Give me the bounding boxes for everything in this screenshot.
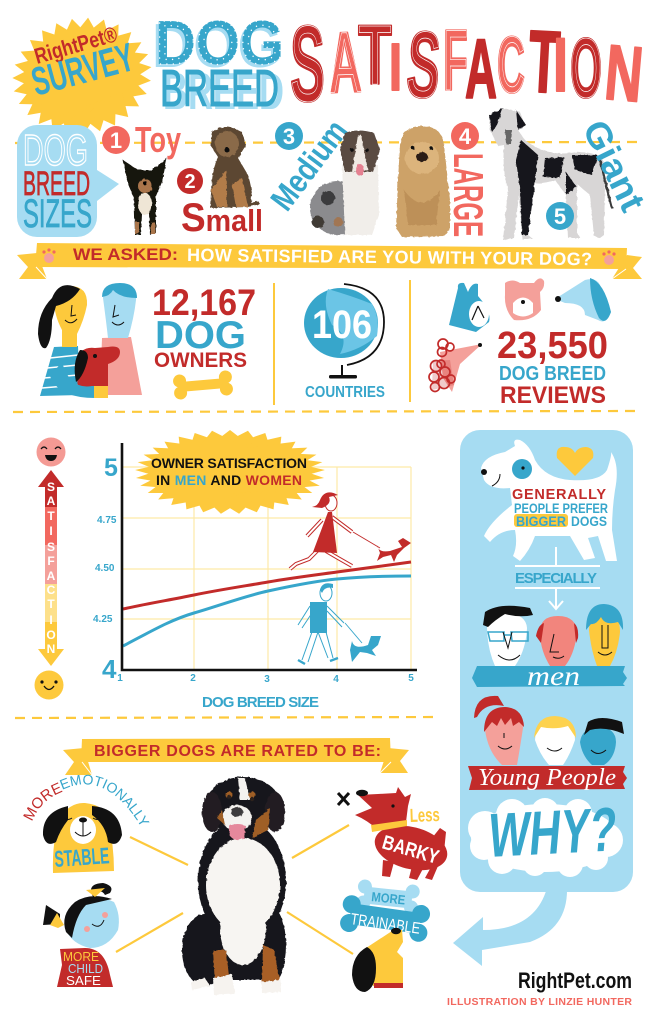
label: satisfaction vertical letters: I bbox=[49, 613, 53, 627]
trait: more trainable bones: TRAINABLE bbox=[349, 911, 421, 938]
callout: owner satisfaction starburst: OWNER SATISFACTION bbox=[151, 455, 307, 471]
stat: 12,167 dog owners: DOG bbox=[155, 314, 246, 357]
trait: more trainable bones: MORE bbox=[371, 889, 406, 908]
photo: border terrier bbox=[210, 127, 260, 208]
ribbon: men bbox=[472, 661, 627, 691]
label: satisfaction vertical letters: A bbox=[47, 569, 56, 583]
trait: less barky: Less bbox=[409, 805, 440, 827]
y axis labels: 5 bbox=[104, 454, 118, 482]
white dog with heart bbox=[481, 440, 617, 561]
trait: more child safe: SAFE bbox=[66, 974, 101, 988]
title: Satisfaction: O bbox=[570, 21, 602, 115]
ribbon: young people: Young People bbox=[478, 765, 616, 791]
title: Dog Breed: DOG bbox=[155, 9, 284, 78]
text: generally people prefer bigger dogs: GENERALLY bbox=[512, 487, 606, 503]
label: countries: COUNTRIES bbox=[305, 384, 385, 401]
callout: owner satisfaction starburst bbox=[135, 417, 355, 520]
size 4 label: Large: LARGE bbox=[445, 153, 492, 237]
title: Dog Breed: DOG bbox=[155, 9, 284, 78]
panel: dog breed sizes bubble: DOG bbox=[23, 126, 88, 175]
label: satisfaction vertical letters: O bbox=[46, 628, 56, 642]
trait: more child safe: CHILD bbox=[68, 962, 103, 976]
badge: RightPet Survey starburst bbox=[0, 0, 184, 152]
icon: globe with 106 bbox=[304, 284, 384, 378]
title: Satisfaction: I bbox=[553, 23, 568, 108]
satisfaction scale arrow bbox=[34, 438, 66, 700]
size 2 label: Small: 2 bbox=[184, 171, 196, 193]
size 5 label: Giant: Giant bbox=[575, 114, 650, 218]
illustration: woman walking dog bbox=[290, 492, 411, 569]
illustration: yellow dog looking up bbox=[352, 928, 403, 992]
title: Satisfaction: S bbox=[290, 3, 325, 124]
trait: more emotionally stable: EMOTIONALLY bbox=[60, 774, 150, 824]
size 4 label: Large bbox=[445, 122, 492, 237]
title: Satisfaction: A bbox=[327, 14, 363, 112]
title: Satisfaction: F bbox=[443, 13, 468, 109]
callout: owner satisfaction starburst: IN MEN AND WOMEN bbox=[156, 472, 302, 488]
title: Satisfaction: S bbox=[290, 3, 325, 124]
icon: globe with 106: 106 bbox=[312, 303, 372, 347]
title: Satisfaction: S bbox=[404, 11, 444, 118]
x axis labels: 4 bbox=[333, 674, 339, 685]
trait: more child safe: MORE bbox=[63, 949, 99, 964]
title: Satisfaction: I bbox=[389, 30, 402, 105]
stat: 23,550 dog breed reviews: REVIEWS bbox=[500, 382, 606, 409]
x axis labels: 5 bbox=[408, 673, 414, 684]
banner: we asked bbox=[17, 243, 642, 279]
group: men faces bbox=[483, 604, 623, 666]
x axis labels: 1 bbox=[117, 673, 123, 684]
cloud: why bbox=[468, 795, 623, 877]
panel: preference bubble with tail arrow bbox=[453, 430, 633, 966]
banner: we asked: HOW SATISFIED ARE YOU WITH YOUR DOG? bbox=[187, 245, 592, 269]
stat: 23,550 dog breed reviews: DOG BREED bbox=[499, 363, 606, 385]
trait: more child safe bbox=[43, 883, 119, 988]
icons: dog breed heads bbox=[429, 278, 611, 392]
title: Satisfaction: C bbox=[497, 20, 525, 109]
label: satisfaction vertical letters: I bbox=[49, 524, 53, 538]
illustration: man walking dog bbox=[298, 583, 381, 664]
panel: dog breed sizes bubble bbox=[17, 125, 119, 237]
title: Satisfaction: A bbox=[327, 14, 363, 112]
title: Satisfaction: F bbox=[443, 13, 468, 109]
title: Dog Breed: DOG bbox=[152, 12, 282, 81]
banner: bigger dogs are rated to be bbox=[63, 738, 409, 775]
series: men bbox=[123, 576, 411, 646]
size 2 label: Small: Small bbox=[181, 196, 263, 240]
title: Dog Breed bbox=[152, 9, 284, 121]
size 3 label: Medium: Medium bbox=[263, 113, 355, 217]
title: Satisfaction: T bbox=[358, 8, 392, 102]
label: satisfaction vertical letters: C bbox=[47, 583, 56, 597]
badge: RightPet Survey starburst: RightPet® bbox=[31, 21, 120, 69]
stat: 12,167 dog owners bbox=[152, 282, 256, 372]
group: young people faces bbox=[474, 696, 624, 765]
trait: less barky: BARKY bbox=[380, 832, 442, 869]
stat: 23,550 dog breed reviews: 23,550 bbox=[497, 325, 608, 367]
icon: content yellow face bbox=[34, 670, 64, 700]
credit: rightpet.com bbox=[447, 968, 632, 1008]
panel: dog breed sizes bubble: BREED bbox=[23, 165, 90, 203]
y axis labels bbox=[93, 454, 118, 684]
trait: more emotionally stable: MORE bbox=[23, 782, 62, 821]
y axis labels: 4 bbox=[102, 654, 117, 684]
title: Satisfaction: C bbox=[497, 20, 525, 109]
trait: more trainable bones bbox=[339, 879, 431, 943]
size 4 label: Large: 4 bbox=[459, 124, 472, 149]
text: generally people prefer bigger dogs: BIGGER bbox=[516, 514, 566, 529]
label: satisfaction vertical letters: A bbox=[47, 494, 56, 508]
size 1 label: Toy: 1 bbox=[110, 128, 122, 153]
stat: 12,167 dog owners: OWNERS bbox=[154, 349, 247, 372]
label: satisfaction vertical letters: F bbox=[47, 554, 55, 568]
title: Satisfaction: S bbox=[404, 11, 444, 118]
label: satisfaction vertical letters: S bbox=[47, 480, 55, 494]
title: Dog Breed: BREED bbox=[163, 63, 284, 121]
stat: 23,550 dog breed reviews bbox=[497, 325, 608, 409]
photo: chow chow bbox=[396, 126, 450, 237]
label: satisfaction vertical letters: T bbox=[47, 597, 55, 611]
size 5 label: Giant: 5 bbox=[554, 204, 566, 229]
trait: less barky bbox=[338, 787, 452, 880]
size 1 label: Toy bbox=[102, 119, 181, 160]
label: satisfaction vertical letters: T bbox=[47, 509, 55, 523]
illustration: couple hugging dog bbox=[38, 283, 142, 398]
title: Satisfaction: T bbox=[358, 8, 392, 102]
series: women bbox=[123, 562, 411, 609]
stat: 12,167 dog owners: 12,167 bbox=[152, 282, 256, 323]
x axis labels bbox=[117, 673, 414, 685]
icon: happy pink face bbox=[36, 438, 66, 466]
photo: great dane bbox=[489, 108, 612, 240]
trait: more emotionally stable bbox=[23, 774, 150, 873]
especially with arrow: ESPECIALLY bbox=[515, 570, 597, 587]
axis title: DOG BREED SIZE bbox=[202, 694, 319, 711]
y axis labels: 4.50 bbox=[95, 563, 115, 574]
size 1 label: Toy: Toy bbox=[135, 119, 181, 160]
title: Satisfaction bbox=[290, 3, 646, 124]
panel: dog breed sizes bubble: SIZES bbox=[23, 192, 92, 236]
title: Satisfaction: A bbox=[465, 22, 497, 116]
title: Satisfaction: O bbox=[570, 21, 602, 115]
size 3 label: Medium: 3 bbox=[283, 124, 295, 149]
badge: RightPet Survey starburst: SURVEY bbox=[27, 35, 139, 105]
banner: we asked: WE ASKED: bbox=[73, 245, 178, 264]
photo: australian shepherd bbox=[310, 130, 380, 235]
photo: chihuahua bbox=[123, 158, 167, 235]
title: Dog Breed: BREED bbox=[160, 60, 279, 118]
ribbon: men: men bbox=[527, 661, 580, 691]
title: Satisfaction: T bbox=[526, 11, 562, 112]
label: satisfaction vertical letters: S bbox=[47, 540, 55, 554]
text: generally people prefer bigger dogs bbox=[512, 487, 608, 529]
x axis labels: 3 bbox=[264, 674, 270, 685]
size 2 label: Small bbox=[177, 168, 263, 240]
photo: bernese mountain dog bbox=[182, 777, 286, 995]
banner: bigger dogs are rated to be: BIGGER DOGS ARE RATED TO BE: bbox=[94, 743, 381, 760]
y axis labels: 4.75 bbox=[97, 515, 117, 526]
label: satisfaction vertical letters bbox=[46, 480, 56, 656]
label: satisfaction vertical letters: N bbox=[47, 642, 55, 656]
y axis labels: 4.25 bbox=[93, 614, 113, 625]
text: generally people prefer bigger dogs: PEOPLE PREFER bbox=[514, 501, 608, 516]
line chart: owner satisfaction bbox=[93, 443, 417, 711]
x axis labels: 2 bbox=[190, 673, 196, 684]
size 5 label: Giant bbox=[546, 114, 650, 230]
text: generally people prefer bigger dogs: DOGS bbox=[571, 514, 607, 529]
especially with arrow bbox=[515, 547, 600, 609]
credit: rightpet.com: ILLUSTRATION BY LINZIE HUNTER bbox=[447, 996, 632, 1008]
icon: bone bbox=[173, 370, 233, 400]
trait: more emotionally stable: STABLE bbox=[54, 842, 110, 872]
